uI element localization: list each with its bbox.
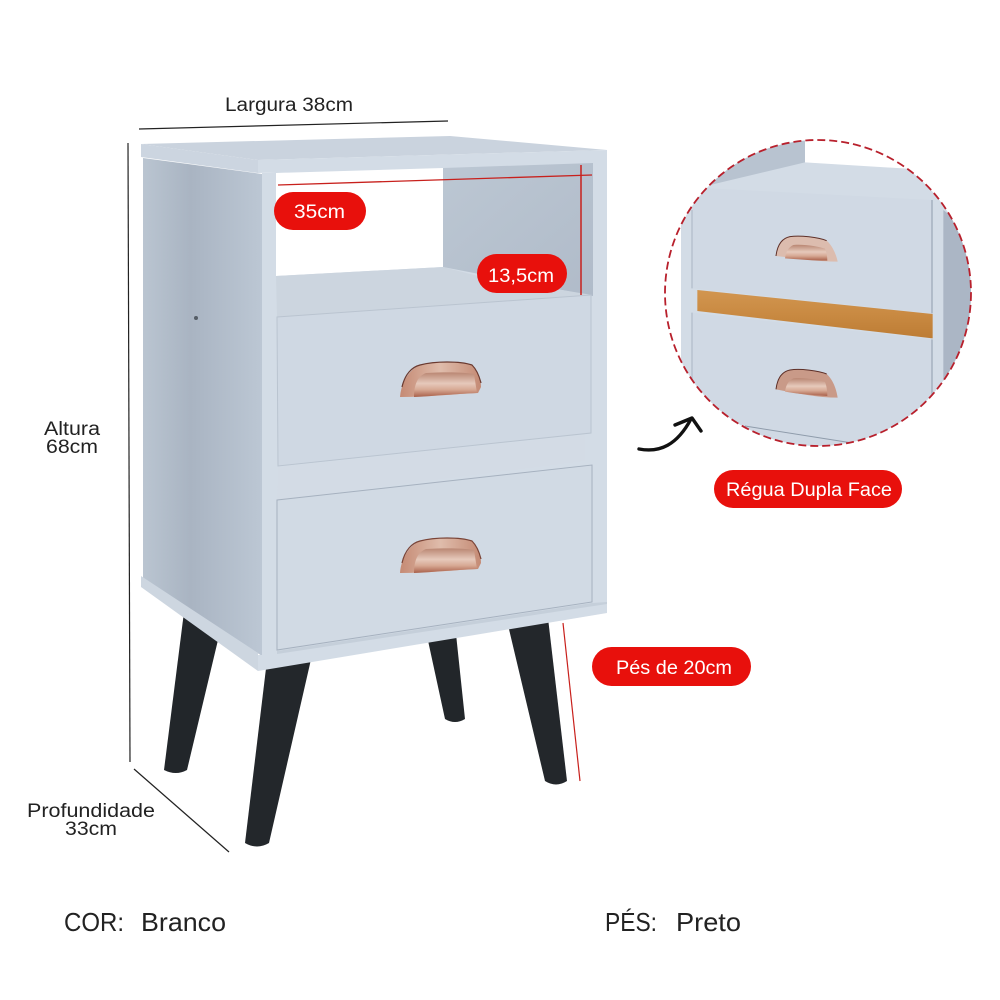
width label: Largura 38cm — [225, 95, 353, 116]
drawer front background — [681, 137, 978, 450]
badge text: 13,5cm — [488, 266, 554, 287]
white area top — [805, 140, 906, 168]
colour label: COR: — [64, 907, 124, 937]
back middle leg — [427, 634, 465, 722]
badge text: Pés de 20cm — [616, 658, 732, 679]
width line — [139, 121, 448, 129]
feet label: PÉS: — [605, 907, 657, 937]
lower detail handle — [776, 369, 838, 398]
badge: 13,5cm — [477, 254, 567, 293]
curved arrow — [639, 418, 701, 450]
badge: 35cm — [274, 192, 366, 230]
arrow shaft — [639, 419, 691, 450]
lower drawer — [277, 465, 592, 650]
depth label: 33cm — [65, 819, 117, 840]
nightstand illustration — [141, 136, 607, 846]
height dimension — [44, 143, 130, 762]
badge: double-sided strip — [714, 470, 902, 508]
circle contents — [681, 137, 978, 450]
upper drawer handle — [400, 362, 481, 397]
badge text: 35cm — [294, 202, 345, 223]
badge text: Régua Dupla Face — [726, 480, 892, 501]
inner width line — [278, 175, 592, 185]
height label: 68cm — [46, 437, 98, 458]
base side edge — [141, 576, 258, 671]
drawer edge left — [692, 210, 693, 379]
badge shape — [274, 192, 366, 230]
open niche white back — [276, 168, 443, 276]
top left edge — [141, 144, 258, 173]
feet label: Preto — [676, 907, 741, 937]
depth line — [134, 769, 229, 852]
upper detail handle — [776, 236, 838, 262]
height label: Altura — [44, 419, 100, 440]
drawer edge right — [931, 200, 933, 394]
screw on side panel — [194, 316, 198, 320]
base front shade — [277, 602, 607, 654]
wood strip — [697, 290, 933, 338]
right side panel — [943, 210, 971, 381]
niche right wall — [443, 163, 593, 296]
top front edge — [258, 150, 607, 173]
top surface — [141, 136, 607, 160]
upper drawer front — [692, 194, 702, 206]
back right leg — [508, 618, 567, 784]
badge shape — [714, 470, 902, 508]
gap between drawers — [277, 435, 585, 500]
foot height line — [563, 623, 580, 781]
colour label: Branco — [141, 907, 226, 937]
back left leg — [164, 612, 218, 773]
width dimension — [139, 95, 448, 129]
bottom drawer edge — [745, 426, 850, 443]
left side panel — [143, 158, 262, 656]
lower drawer handle — [400, 538, 481, 573]
badge: feet height — [592, 647, 751, 686]
upper drawer — [277, 295, 591, 466]
inner height line — [580, 165, 582, 295]
dashed ring — [665, 140, 971, 446]
depth dimension — [27, 769, 229, 852]
niche floor — [276, 267, 592, 318]
arrow head — [675, 418, 701, 431]
front left leg — [245, 655, 312, 846]
grey inner wall — [712, 140, 805, 184]
depth label: Profundidade — [27, 801, 155, 822]
detail circle — [665, 137, 978, 450]
height line — [128, 143, 130, 762]
lower drawer front — [694, 384, 929, 446]
front frame — [258, 160, 607, 671]
badge shape — [477, 254, 567, 293]
badge shape — [592, 647, 751, 686]
